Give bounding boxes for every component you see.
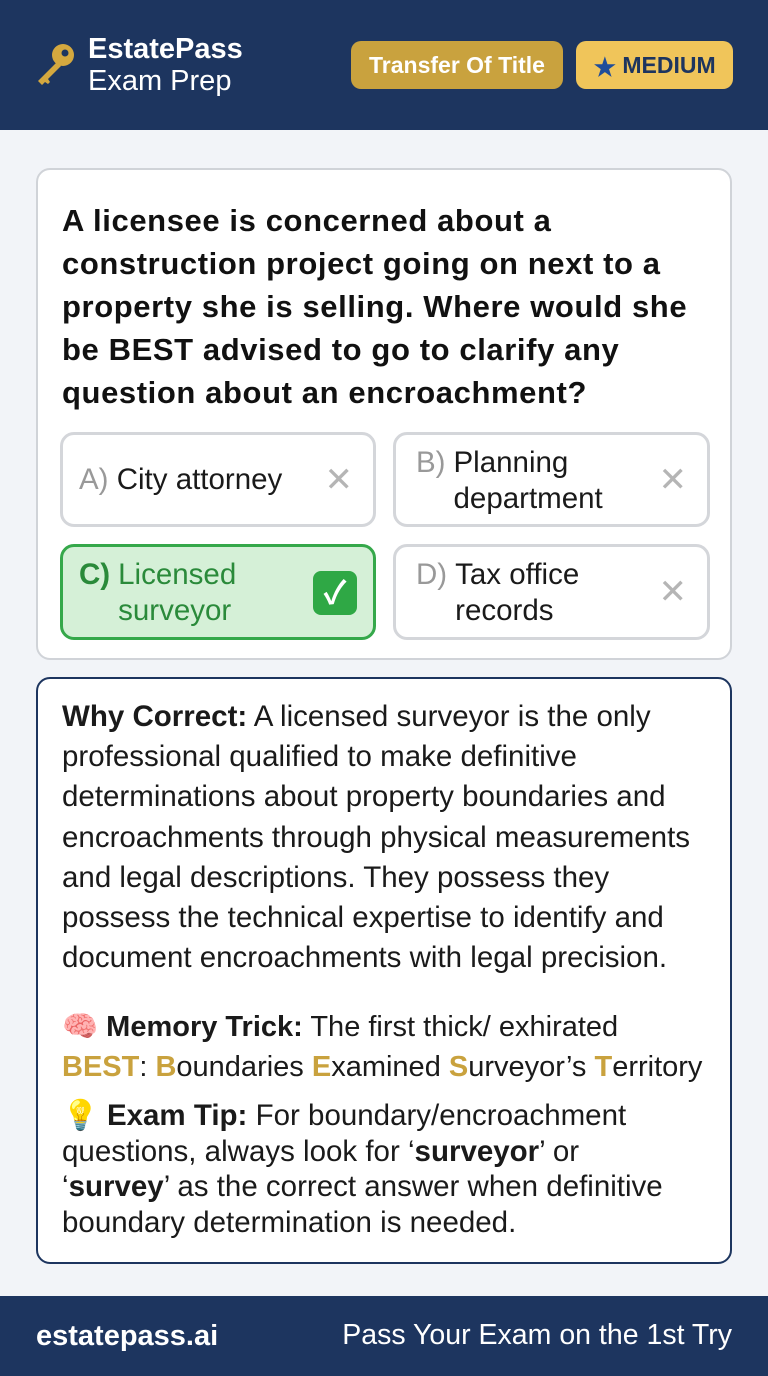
option D: records: [455, 594, 554, 627]
question text: [62, 203, 687, 410]
question text: question about an encroachment?: [62, 375, 587, 410]
question text: construction project going on next to a: [62, 246, 661, 281]
option D: D): [416, 558, 447, 591]
question text: A licensee is concerned about a: [62, 203, 552, 238]
logo text: Exam Prep: [88, 65, 231, 97]
option C (correct): [60, 544, 376, 640]
logo text: [88, 33, 243, 97]
memory trick: [62, 1011, 702, 1083]
why correct: determinations about property boundaries and: [62, 780, 666, 813]
option C (correct): surveyor: [118, 594, 231, 627]
logo text: EstatePass: [88, 33, 243, 65]
icon: key: [38, 44, 74, 85]
memory trick: BEST: Boundaries Examined Surveyor’s Territory: [62, 1051, 702, 1083]
badge: difficulty: ★: [593, 54, 616, 80]
option A: [60, 432, 376, 527]
option D: Tax office: [455, 558, 579, 591]
why correct: [62, 700, 690, 974]
option B: [393, 432, 710, 527]
badge: difficulty: [576, 41, 733, 89]
explanation card: [36, 677, 732, 1264]
option A: A) City attorney: [79, 463, 282, 496]
icon: check: [313, 571, 357, 615]
option B: ✕: [658, 460, 687, 498]
option C (correct): C): [79, 558, 110, 591]
badge: topic: [351, 41, 563, 89]
why correct: professional qualified to make definitive: [62, 740, 577, 773]
question text: property she is selling. Where would she: [62, 289, 687, 324]
why correct: and legal descriptions. They possess they: [62, 861, 609, 894]
why correct: Why Correct: A licensed surveyor is the only: [62, 700, 651, 733]
exam tip: ‘survey’ as the correct answer when definitive: [62, 1170, 663, 1203]
exam tip: questions, always look for ‘surveyor’ or: [62, 1135, 579, 1168]
icon: check: ✓: [323, 575, 347, 611]
option B: Planning: [454, 446, 568, 479]
option C (correct): Licensed: [118, 558, 236, 591]
memory trick: 🧠 Memory Trick: The first thick/ exhirated: [62, 1011, 618, 1043]
question text: be BEST advised to go to clarify any: [62, 332, 619, 367]
option D: [393, 544, 710, 640]
exam tip: [62, 1098, 663, 1239]
exam tip: boundary determination is needed.: [62, 1206, 516, 1239]
option B: department: [454, 482, 603, 515]
footer tagline: Pass Your Exam on the 1st Try: [342, 1319, 732, 1351]
badge: difficulty: MEDIUM: [622, 52, 716, 78]
footer bar: [0, 1296, 768, 1376]
why correct: possess the technical expertise to identify and: [62, 901, 664, 934]
question card: [36, 168, 732, 660]
badge: topic: Transfer Of Title: [369, 52, 545, 78]
footer site: estatepass.ai: [36, 1320, 218, 1352]
option A: ✕: [324, 460, 353, 498]
why correct: encroachments through physical measurements: [62, 821, 690, 854]
header bar: [0, 0, 768, 130]
option D: ✕: [658, 573, 687, 611]
exam tip: 💡 Exam Tip: For boundary/encroachment: [62, 1099, 626, 1132]
why correct: document encroachments with legal precision.: [62, 941, 667, 974]
option B: B): [416, 446, 446, 479]
